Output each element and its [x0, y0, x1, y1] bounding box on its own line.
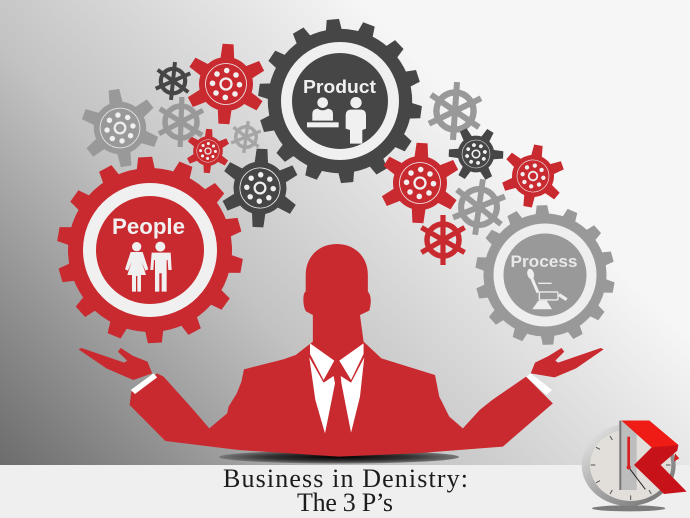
gear: People — [52, 152, 248, 348]
label: Product: Product — [303, 77, 376, 97]
footer band — [0, 465, 690, 518]
right cuff — [526, 373, 552, 395]
label: Process: Process — [510, 252, 578, 271]
wheel: gray right top — [428, 80, 482, 142]
man shadow — [219, 450, 459, 464]
title: Business in Denistry: — [223, 464, 468, 493]
logo: clock with red R — [582, 421, 687, 511]
wheel: gray left — [159, 96, 203, 148]
icon: dental chair — [526, 268, 567, 309]
wheel: gray tiny — [230, 119, 262, 155]
shirt and collar — [309, 343, 364, 433]
wheel: gray right lower — [451, 176, 507, 238]
wheel: red lower — [421, 215, 465, 265]
icon: person at desk and customer — [307, 97, 366, 144]
title: The 3 P’s — [297, 488, 393, 517]
businessman silhouette — [79, 244, 604, 457]
gear: tiny red — [186, 128, 230, 174]
label: People: People — [112, 214, 185, 239]
gear: Product — [252, 12, 428, 190]
gear: red right large — [380, 141, 460, 225]
icon: woman and man — [125, 242, 172, 292]
gear: Process — [472, 202, 618, 348]
gear: small red top — [186, 42, 266, 126]
title — [223, 464, 468, 517]
right hand — [531, 348, 604, 377]
gear: dark right — [440, 117, 512, 191]
gear: small dark bottom — [221, 147, 299, 229]
gear: red far right — [498, 140, 568, 212]
left cuff — [131, 373, 157, 394]
gear: small gray left — [77, 84, 163, 172]
left hand — [79, 348, 152, 380]
body — [130, 244, 553, 457]
wheel: dark small — [155, 60, 191, 102]
